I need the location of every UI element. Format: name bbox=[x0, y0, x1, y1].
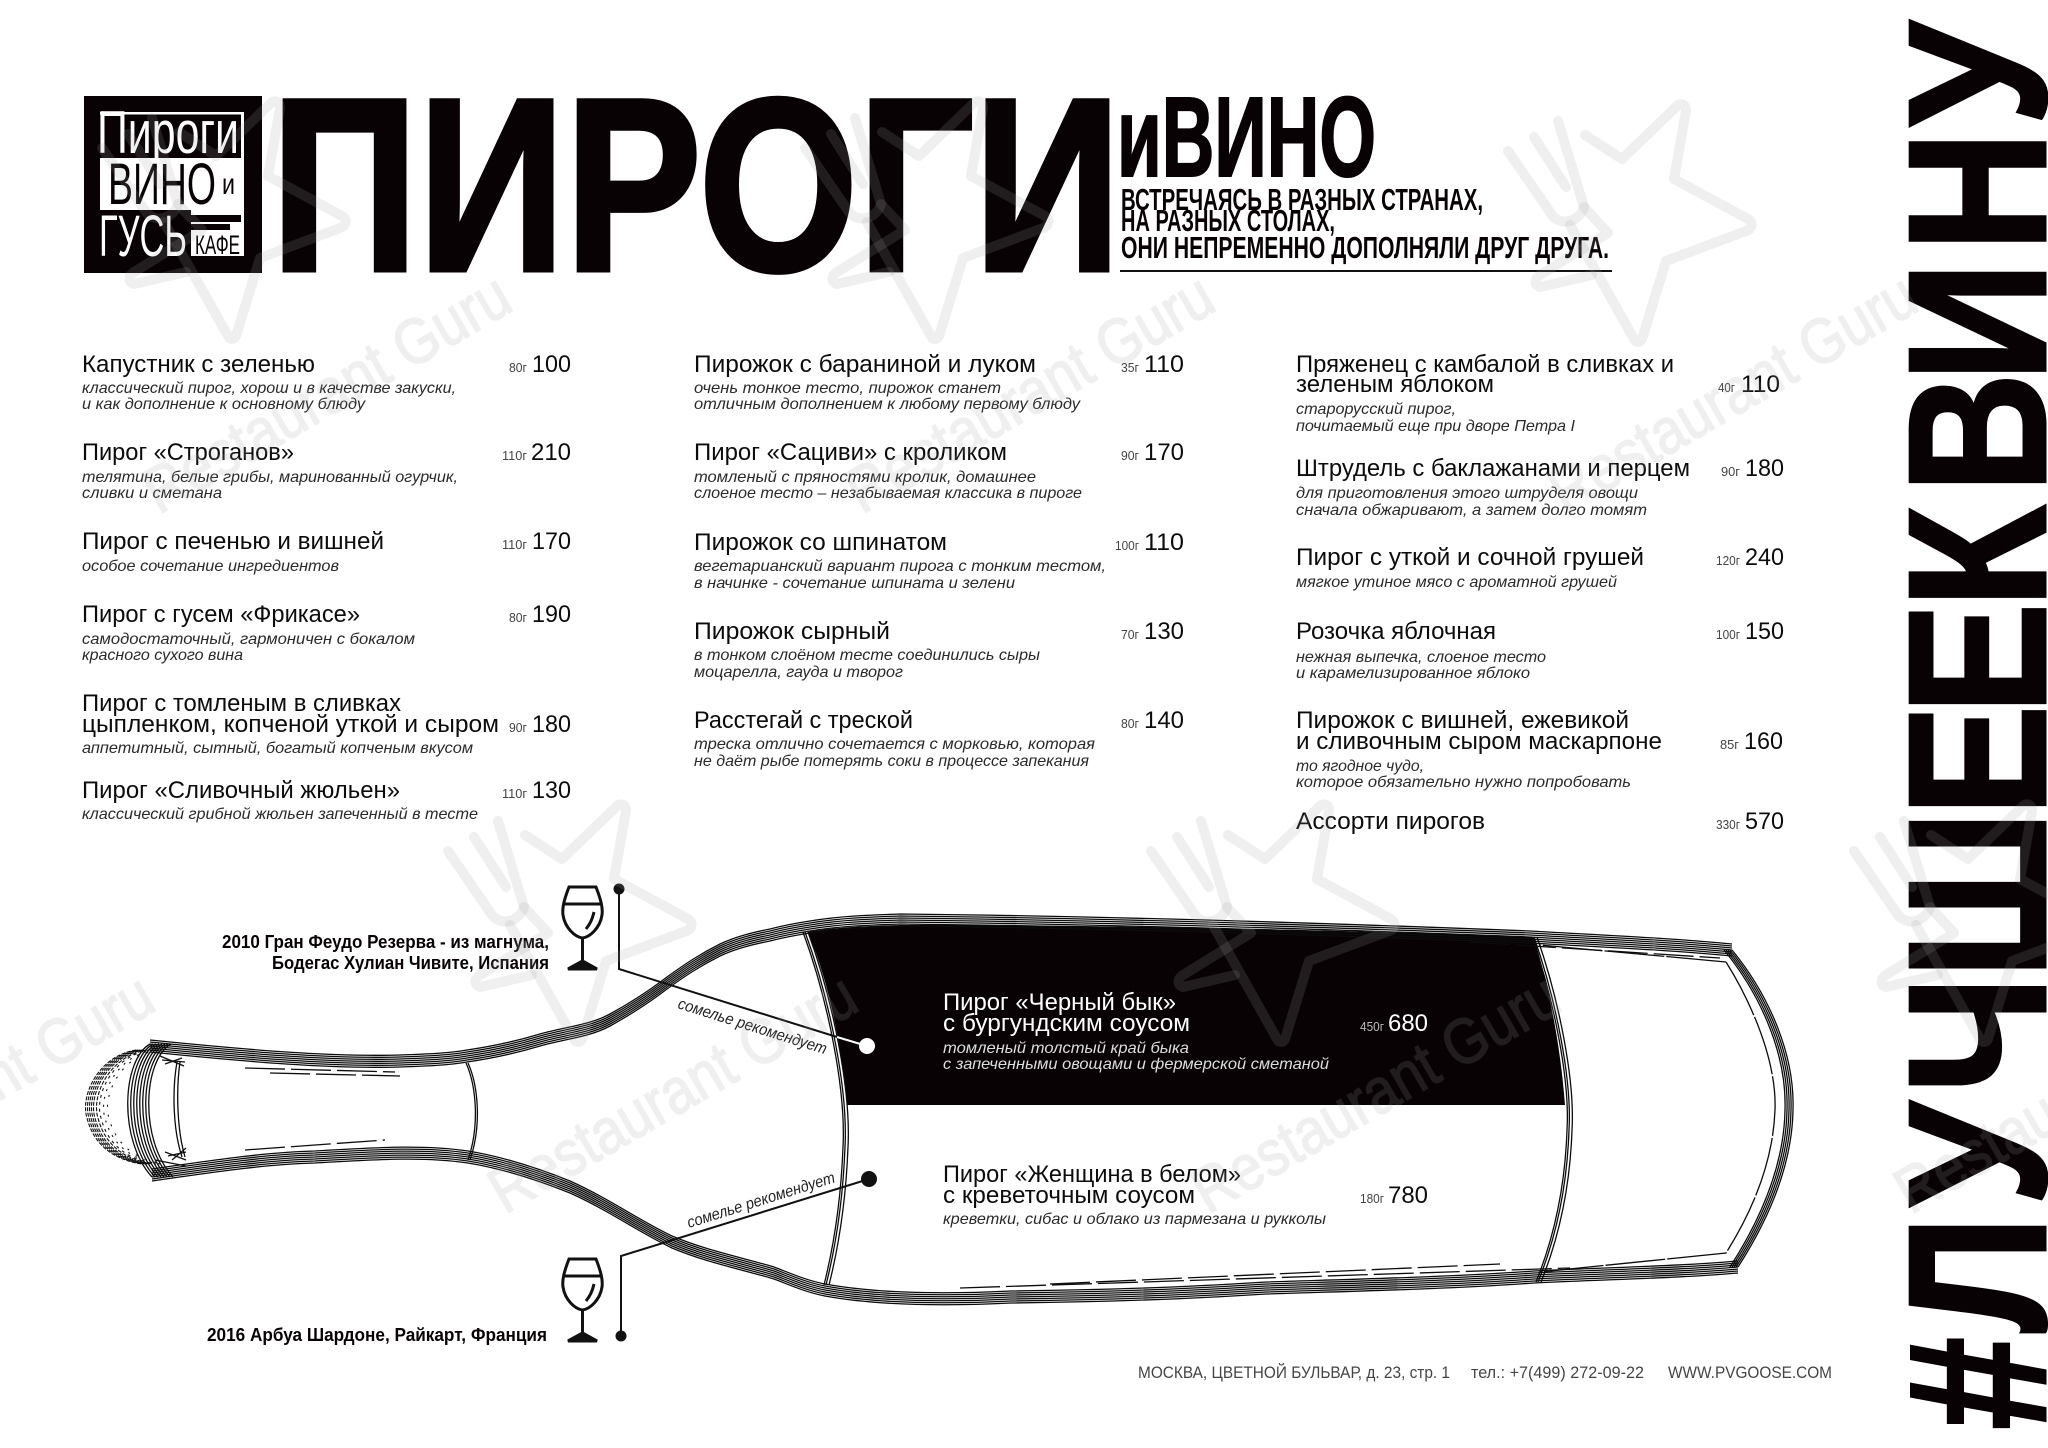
featured pie: Черный бык: 450г bbox=[1360, 1019, 1384, 1034]
item: Пирожок с бараниной и луком: 35г bbox=[1121, 360, 1139, 375]
item: Пирог с печенью и вишней: Пирог с печенью и вишней bbox=[82, 528, 384, 555]
title: ПИРОГИ: ПИРОГИ bbox=[271, 48, 1121, 323]
item: Пряженец с камбалой: старорусский пирог, bbox=[1296, 401, 1456, 418]
footer contacts: тел.: +7(499) 272-09-22 bbox=[1471, 1363, 1644, 1382]
item: Пирожок сырный: 70г bbox=[1121, 627, 1139, 642]
item: Пирог с томленым: 90г bbox=[509, 720, 527, 735]
bottle label: black band bbox=[808, 925, 1565, 1105]
item: Пирог с печенью и вишней bbox=[82, 528, 571, 575]
item: Пирожок с вишней: 85г bbox=[1720, 737, 1739, 752]
item: Пирог «Сливочный жюльен»: 130 bbox=[532, 777, 571, 804]
item: Пирог с гусем «Фрикасе»: красного сухого вина bbox=[82, 647, 243, 664]
item: Пирожок с бараниной и луком: очень тонкое тесто, пирожок станет bbox=[694, 380, 1001, 397]
item: Пирог с печенью и вишней: особое сочетание ингредиентов bbox=[82, 558, 339, 575]
watermark: Restaurant Guru: Restaurant Guru bbox=[476, 959, 869, 1227]
item: Пирог «Сациви» с кроликом: 90г bbox=[1121, 448, 1139, 463]
item: Штрудель с баклажанами и перцем bbox=[1296, 455, 1784, 519]
item: Ассорти пирогов: Ассорти пирогов bbox=[1296, 808, 1485, 835]
wine label: bottom: 2016 Арбуа Шардоне, Райкарт, Франция bbox=[207, 1325, 547, 1345]
watermark: Restaurant Guru bbox=[0, 101, 2048, 1227]
item: Капустник с зеленью: Капустник с зеленью bbox=[82, 351, 315, 378]
subtitle: НА РАЗНЫХ СТОЛАХ, bbox=[1121, 203, 1335, 238]
featured pie: Женщина в белом: с креветочным соусом bbox=[943, 1182, 1195, 1209]
item: Расстегай с треской: 140 bbox=[1144, 707, 1184, 734]
featured pie: Женщина в белом: 780 bbox=[1388, 1182, 1428, 1209]
wine label: top bbox=[222, 932, 549, 973]
watermark: Restaurant Guru: Restaurant Guru bbox=[1536, 259, 1929, 527]
item: Пряженец с камбалой: Пряженец с камбалой в сливках и bbox=[1296, 351, 1674, 378]
logo: КАФЕ bbox=[195, 230, 240, 260]
item: Пирог «Строганов»: телятина, белые грибы, маринованный огурчик, bbox=[82, 469, 458, 486]
logo: ГУСЬ bbox=[99, 204, 187, 269]
item: Штрудель с баклажанами и перцем: 90г bbox=[1721, 464, 1740, 479]
item: Пирог с уткой и сочной грушей: мягкое утиное мясо с ароматной грушей bbox=[1296, 574, 1617, 591]
item: Пирог «Строганов»: 110г bbox=[502, 448, 527, 463]
featured pie: Женщина в белом: 180г bbox=[1360, 1191, 1384, 1206]
item: Расстегай с треской: Расстегай с треской bbox=[694, 707, 913, 734]
item: Расстегай с треской: 80г bbox=[1121, 716, 1139, 731]
item: Розочка яблочная: 150 bbox=[1745, 618, 1784, 645]
menu column 1 bbox=[82, 351, 571, 823]
item: Капустник с зеленью: 80г bbox=[509, 360, 527, 375]
wine label: top: Бодегас Хулиан Чивите, Испания bbox=[272, 953, 549, 973]
logo: и bbox=[222, 168, 235, 201]
item: Ассорти пирогов: 570 bbox=[1745, 808, 1784, 835]
item: Пирожок со шпинатом: 100г bbox=[1115, 538, 1139, 553]
featured pie: Черный бык: Пирог «Черный бык» bbox=[943, 989, 1176, 1016]
item: Пирог с уткой и сочной грушей: 120г bbox=[1716, 553, 1740, 568]
item: Пряженец с камбалой: 110 bbox=[1741, 371, 1780, 398]
item: Пирог с гусем «Фрикасе» bbox=[82, 601, 571, 664]
item: Пирог «Сливочный жюльен»: Пирог «Сливочный жюльен» bbox=[82, 777, 400, 804]
item: Розочка яблочная: 100г bbox=[1716, 627, 1740, 642]
item: Пирог «Строганов» bbox=[82, 439, 571, 502]
subtitle bbox=[1120, 182, 1612, 272]
item: Пирожок сырный: моцарелла, гауда и творог bbox=[694, 664, 903, 681]
item: Розочка яблочная bbox=[1296, 618, 1784, 682]
item: Расстегай с треской: треска отлично сочетается с морковью, которая bbox=[694, 736, 1095, 753]
item: Пирог с гусем «Фрикасе»: самодостаточный, гармоничен с бокалом bbox=[82, 631, 415, 648]
item: Пирог «Строганов»: Пирог «Строганов» bbox=[82, 439, 294, 466]
item: Пирожок с бараниной и луком: отличным дополнением к любому первому блюду bbox=[694, 396, 1081, 413]
icon: wine glass bottom bbox=[563, 1259, 602, 1341]
item: Пирог с томленым: цыпленком, копченой уткой и сыром bbox=[82, 711, 499, 738]
item: Пирог с томленым bbox=[82, 690, 571, 757]
featured pie: Черный бык: с бургундским соусом bbox=[943, 1010, 1190, 1037]
featured pie: Женщина в белом: Пирог «Женщина в белом» bbox=[943, 1161, 1241, 1188]
sommelier pointer: bottom: сомелье рекомендует bbox=[685, 1170, 837, 1232]
item: Пирог с томленым: аппетитный, сытный, богатый копченым вкусом bbox=[82, 740, 473, 757]
item: Пряженец с камбалой bbox=[1296, 351, 1780, 435]
featured pie: Черный бык bbox=[943, 989, 1428, 1073]
footer contacts: МОСКВА, ЦВЕТНОЙ БУЛЬВАР, д. 23, стр. 1 bbox=[1138, 1363, 1450, 1382]
logo bbox=[84, 96, 262, 273]
item: Ассорти пирогов: 330г bbox=[1716, 817, 1740, 832]
item: Пирог с печенью и вишней: 170 bbox=[532, 528, 571, 555]
item: Капустник с зеленью: и как дополнение к основному блюду bbox=[82, 396, 366, 413]
item: Пирог с печенью и вишней: 110г bbox=[502, 537, 527, 552]
item: Пирожок сырный: Пирожок сырный bbox=[694, 618, 890, 645]
item: Штрудель с баклажанами и перцем: для приготовления этого штруделя овощи bbox=[1296, 485, 1638, 502]
title: и ВИНО: иВИНО bbox=[1117, 74, 1376, 200]
item: Пирог «Сациви» с кроликом: слоеное тесто – незабываемая классика в пироге bbox=[694, 485, 1082, 502]
item: Пирожок с вишней: и сливочным сыром маскарпоне bbox=[1296, 728, 1662, 755]
item: Пирог «Сациви» с кроликом bbox=[694, 439, 1184, 502]
item: Пряженец с камбалой: 40г bbox=[1718, 380, 1735, 395]
item: Пирожок сырный: в тонком слоёном тесте соединились сыры bbox=[694, 647, 1040, 664]
item: Розочка яблочная: Розочка яблочная bbox=[1296, 618, 1496, 645]
sommelier pointer: top bbox=[614, 884, 875, 1058]
logo: Пироги bbox=[97, 99, 239, 166]
featured pie: Черный бык: с запеченными овощами и фермерской сметаной bbox=[943, 1056, 1329, 1073]
item: Пряженец с камбалой: зеленым яблоком bbox=[1296, 371, 1494, 398]
wine bottle illustration bbox=[86, 914, 1793, 1305]
logo: ВИНО bbox=[108, 152, 216, 217]
item: Пирог «Сациви» с кроликом: томленый с пряностями кролик, домашнее bbox=[694, 469, 1036, 486]
watermark: Restaurant Guru: Restaurant Guru bbox=[1179, 959, 1572, 1227]
item: Капустник с зеленью: классический пирог, хорош и в качестве закуски, bbox=[82, 380, 456, 397]
item: Штрудель с баклажанами и перцем: Штрудель с баклажанами и перцем bbox=[1296, 455, 1690, 482]
item: Пирог «Сациви» с кроликом: Пирог «Сациви» с кроликом bbox=[694, 439, 1007, 466]
item: Пряженец с камбалой: почитаемый еще при дворе Петра I bbox=[1296, 418, 1576, 435]
footer contacts: WWW.PVGOOSE.COM bbox=[1668, 1363, 1832, 1382]
footer contacts bbox=[1138, 1363, 1832, 1382]
item: Пирог с уткой и сочной грушей: Пирог с уткой и сочной грушей bbox=[1296, 544, 1644, 571]
item: Капустник с зеленью bbox=[82, 351, 571, 413]
item: Пирожок сырный: 130 bbox=[1144, 618, 1184, 645]
item: Пирожок с вишней: то ягодное чудо, bbox=[1296, 758, 1424, 775]
item: Ассорти пирогов bbox=[1296, 808, 1784, 835]
icon: wine glass top bbox=[563, 887, 602, 969]
item: Пирожок со шпинатом: 110 bbox=[1144, 529, 1184, 556]
item: Пирог с гусем «Фрикасе»: Пирог с гусем «Фрикасе» bbox=[82, 601, 360, 628]
item: Пирожок со шпинатом: в начинке - сочетание шпината и зелени bbox=[694, 575, 1015, 592]
item: Пирожок с бараниной и луком: Пирожок с бараниной и луком bbox=[694, 351, 1036, 378]
sommelier pointer: top: сомелье рекомендует bbox=[676, 996, 829, 1058]
item: Капустник с зеленью: 100 bbox=[532, 351, 571, 378]
item: Расстегай с треской bbox=[694, 707, 1184, 770]
wine label: top: 2010 Гран Феудо Резерва - из магнума, bbox=[222, 932, 549, 952]
sommelier pointer: bottom bbox=[616, 1170, 877, 1342]
item: Расстегай с треской: не даёт рыбе потерять соки в процессе запекания bbox=[694, 753, 1089, 770]
watermark: Restaurant Guru: Restaurant Guru bbox=[833, 259, 1226, 527]
item: Пирог с уткой и сочной грушей: 240 bbox=[1745, 544, 1784, 571]
item: Пирожок с бараниной и луком bbox=[694, 351, 1184, 413]
featured pie: Женщина в белом bbox=[943, 1161, 1428, 1228]
item: Пирожок со шпинатом bbox=[694, 529, 1184, 592]
menu column 3 bbox=[1296, 351, 1784, 835]
item: Пирог «Сливочный жюльен»: 110г bbox=[502, 786, 527, 801]
item: Пирог «Строганов»: сливки и сметана bbox=[82, 485, 222, 502]
item: Пирог с томленым: 180 bbox=[532, 711, 571, 738]
item: Пирожок с вишней bbox=[1296, 707, 1783, 791]
item: Штрудель с баклажанами и перцем: 180 bbox=[1745, 455, 1784, 482]
item: Пирог «Сливочный жюльен»: классический грибной жюльен запеченный в тесте bbox=[82, 806, 478, 823]
item: Пирожок сырный bbox=[694, 618, 1184, 681]
item: Пирог с гусем «Фрикасе»: 190 bbox=[532, 601, 571, 628]
menu column 2 bbox=[694, 351, 1184, 770]
featured pie: Женщина в белом: креветки, сибас и облако из пармезана и рукколы bbox=[943, 1211, 1326, 1228]
item: Пирог «Сливочный жюльен» bbox=[82, 777, 571, 823]
item: Пирог «Строганов»: 210 bbox=[531, 439, 571, 466]
watermark: Restaurant Guru: Restaurant Guru bbox=[130, 259, 523, 527]
item: Пирожок с вишней: 160 bbox=[1744, 728, 1783, 755]
item: Пирожок со шпинатом: вегетарианский вариант пирога с тонким тестом, bbox=[694, 558, 1106, 575]
item: Пирог с томленым: Пирог с томленым в сливках bbox=[82, 690, 401, 717]
item: Розочка яблочная: нежная выпечка, слоеное тесто bbox=[1296, 649, 1546, 666]
subtitle: ВСТРЕЧАЯСЬ В РАЗНЫХ СТРАНАХ, bbox=[1121, 182, 1483, 217]
item: Пирожок с вишней: Пирожок с вишней, ежевикой bbox=[1296, 707, 1629, 734]
item: Пирожок с вишней: которое обязательно нужно попробовать bbox=[1296, 774, 1631, 791]
item: Пирожок со шпинатом: Пирожок со шпинатом bbox=[694, 529, 947, 556]
subtitle: ОНИ НЕПРЕМЕННО ДОПОЛНЯЛИ ДРУГ ДРУГА. bbox=[1121, 230, 1609, 265]
item: Пирог с гусем «Фрикасе»: 80г bbox=[509, 610, 527, 625]
item: Пирог с уткой и сочной грушей bbox=[1296, 544, 1784, 591]
item: Штрудель с баклажанами и перцем: сначала обжаривают, а затем долго томят bbox=[1296, 502, 1647, 519]
item: Розочка яблочная: и карамелизированное яблоко bbox=[1296, 665, 1530, 682]
item: Пирог «Сациви» с кроликом: 170 bbox=[1144, 439, 1184, 466]
item: Пирожок с бараниной и луком: 110 bbox=[1144, 351, 1184, 378]
featured pie: Черный бык: томленый толстый край быка bbox=[943, 1040, 1189, 1057]
featured pie: Черный бык: 680 bbox=[1388, 1010, 1428, 1037]
